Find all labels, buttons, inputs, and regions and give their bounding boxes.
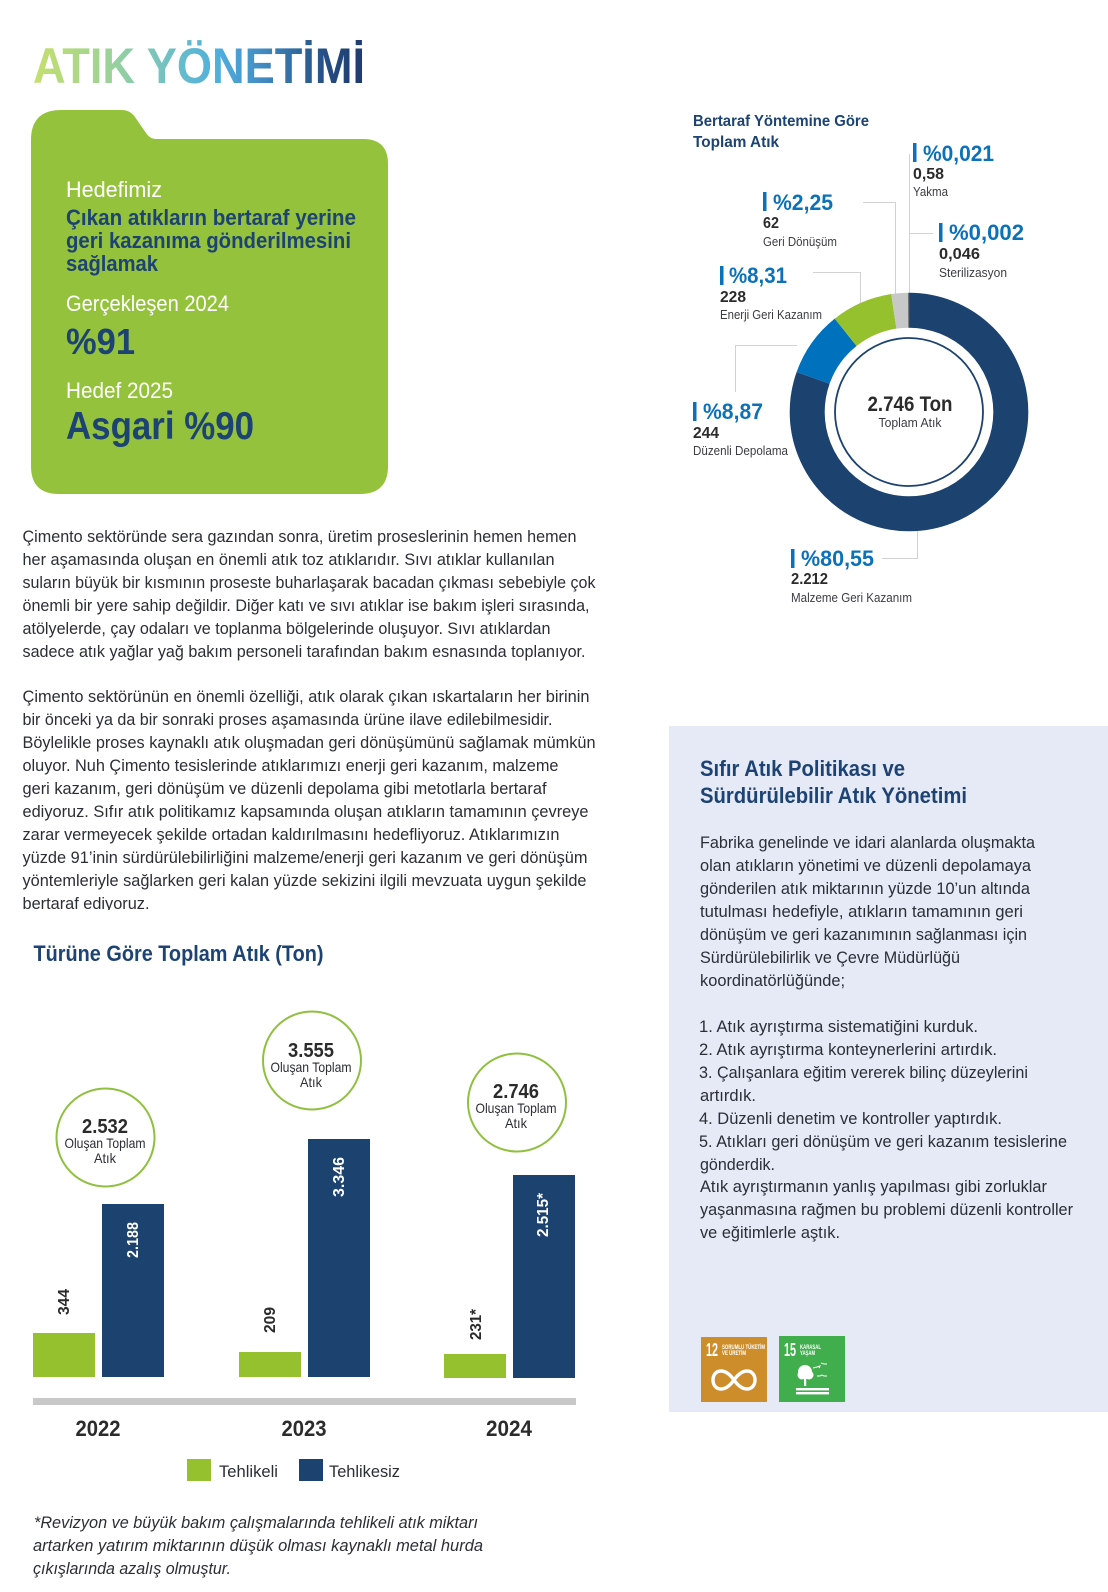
panel action list: yaşanmasına rağmen bu problemi düzenli kontroller [700, 1200, 1073, 1219]
bars 2022 [33, 1204, 164, 1377]
axis [33, 1398, 576, 1405]
icon: SDG 12: SORUMLU TÜKETİM [722, 1344, 765, 1351]
realised label: Gerçekleşen 2024 [66, 291, 229, 316]
total bubble 2024: 2.746 [493, 1081, 539, 1103]
label: Geri Dönüşüm: Geri Dönüşüm [763, 234, 837, 249]
bar chart: waste by type [33, 1012, 576, 1441]
donut centre total: 2.746 Ton [868, 393, 952, 416]
total bubble 2022 [56, 1088, 154, 1186]
year labels: 2023 [282, 1416, 326, 1441]
label: Düzenli Depolama: 244 [693, 425, 719, 442]
year labels [76, 1416, 533, 1441]
panel heading [700, 756, 967, 808]
label: Geri Dönüşüm: 62 [763, 215, 779, 232]
panel intro text: Fabrika genelinde ve idari alanlarda oluşmakta [700, 833, 1036, 852]
panel intro text [700, 833, 1036, 990]
panel action list: 1. Atık ayrıştırma sistematiğini kurduk. [699, 1017, 978, 1036]
label: Düzenli Depolama: %8,87 [703, 399, 763, 424]
text block: intro paragraph 1: atölyelerde, çay odaları ve toplanma bölgelerinde oluşuyor. Sıvı atıklardan [22, 619, 550, 638]
icon: SDG 12: 12 [706, 1340, 718, 1360]
year labels: 2024 [486, 1416, 533, 1441]
label: Sterilizasyon: %0,002 [949, 220, 1024, 245]
label: Sterilizasyon: 0,046 [939, 246, 980, 263]
target statement: Çıkan atıkların bertaraf yerine [66, 205, 356, 230]
icon: SDG 15: YAŞAM [800, 1351, 815, 1357]
legend [187, 1459, 400, 1481]
icon: SDG 12 [701, 1337, 767, 1402]
text block: intro paragraph 2: yöntemleriyle sağlarken geri kalan yüzde sekizini ilgili mevzuata uygun şekilde [22, 871, 586, 890]
panel action list: 4. Düzenli denetim ve kontroller yaptırdık. [699, 1109, 1002, 1128]
donut ring [807, 310, 1011, 514]
text block: intro paragraph 1 [22, 527, 596, 661]
label: Enerji Geri Kazanım [720, 263, 822, 322]
2025 target label: Hedef 2025 [66, 378, 173, 403]
panel intro text: olan atıkların yönetimi ve düzenli depolamaya [700, 856, 1032, 875]
target statement: sağlamak [66, 251, 159, 276]
total bubble 2023 [263, 1012, 361, 1110]
panel action list: gönderdik. [700, 1155, 775, 1174]
donut chart: disposal method [736, 154, 1011, 558]
label: Sterilizasyon [939, 220, 1024, 280]
panel action list: 5. Atıkları geri dönüşüm ve geri kazanım tesislerine [699, 1132, 1067, 1151]
panel intro text: koordinatörlüğünde; [700, 971, 845, 990]
text block: intro paragraph 1: önemli bir yere sahip değildir. Diğer katı ve sıvı atıklar ise bakım işleri sırasında, [22, 596, 590, 615]
panel intro text: tutulması hedefiyle, atıkların tamamının geri [700, 902, 1023, 921]
panel intro text: dönüşüm ve geri kazanımının sağlanması için [700, 925, 1027, 944]
text block: intro paragraph 2: bir önceki ya da bir sonraki proses aşamasında ürüne ilave edilebilmesidir. [22, 710, 552, 729]
donut centre total [868, 393, 952, 430]
total bubble 2024: Oluşan Toplam [476, 1100, 556, 1116]
text block: intro paragraph 2 [20, 687, 596, 916]
bars 2024: 2.515* [535, 1192, 552, 1237]
label: Malzeme Geri Kazanım [791, 546, 912, 605]
text block: intro paragraph 2: yüzde 91’inin sürdürülebilirliğini malzeme/enerji geri kazanım ve geri dönüşüm [22, 848, 588, 867]
text block: intro paragraph 2: ediyoruz. Sıfır atık politikamız kapsamında oluşan atıkların tamamının çevreye [22, 802, 588, 821]
inner ring [835, 338, 983, 486]
text block: intro paragraph 1: suların büyük bir kısmının proseste buharlaşarak bacadan çıkması sebebiyle çok [22, 573, 596, 592]
label: Enerji Geri Kazanım: 228 [720, 289, 746, 306]
label: Yakma: %0,021 [923, 141, 994, 166]
folder shape [31, 110, 388, 494]
bars 2024 [444, 1175, 575, 1378]
label: Geri Dönüşüm: %2,25 [773, 190, 833, 215]
icon: SDG 15 [779, 1336, 845, 1402]
heading: disposal method: Bertaraf Yöntemine Göre [693, 113, 869, 130]
label: Malzeme Geri Kazanım: %80,55 [801, 546, 874, 571]
heading: disposal method: Toplam Atık [693, 134, 779, 151]
2025 target value: Asgari %90 [66, 405, 254, 448]
heading: waste by type: Türüne Göre Toplam Atık (Ton) [34, 941, 324, 966]
bars 2023: 3.346 [331, 1157, 348, 1197]
bars 2022: 2.188 [125, 1222, 142, 1258]
bars 2024: 231* [468, 1308, 485, 1340]
target label: Hedefimiz [66, 177, 162, 202]
footnote [33, 1513, 483, 1578]
target statement: geri kazanıma gönderilmesini [66, 228, 351, 253]
target statement [66, 205, 356, 276]
footnote: artarken yatırım miktarının düşük olması kaynaklı metal hurda [33, 1536, 483, 1555]
text block: intro paragraph 2: zarar vermeyecek şekilde ortadan kaldırılmasını hedefliyoruz. Atıklarımızın [22, 825, 560, 844]
text block: intro paragraph 1: her aşamasında oluşan en önemli atık toz atıklarıdır. Sıvı atıklar kullanılan [22, 550, 554, 569]
label: Sterilizasyon: Sterilizasyon [939, 265, 1007, 280]
label: Düzenli Depolama [693, 399, 789, 458]
total bubble 2024: Atık [505, 1115, 528, 1131]
label: Enerji Geri Kazanım: Enerji Geri Kazanım [720, 307, 822, 322]
bars 2023 [239, 1139, 370, 1377]
panel background [669, 726, 1108, 1412]
panel: zero waste policy [669, 726, 1108, 1412]
panel action list: 2. Atık ayrıştırma konteynerlerini artırdık. [699, 1040, 997, 1059]
label: Malzeme Geri Kazanım: Malzeme Geri Kazanım [791, 590, 912, 605]
realised value: %91 [66, 321, 135, 362]
label: Enerji Geri Kazanım: %8,31 [729, 263, 787, 288]
label: Yakma: 0,58 [913, 166, 944, 183]
footnote: çıkışlarında azalış olmuştur. [33, 1559, 231, 1578]
label: Yakma [913, 141, 994, 199]
label: Yakma: Yakma [913, 184, 949, 199]
text block: intro paragraph 2: bertaraf ediyoruz. [22, 894, 150, 913]
text block: intro paragraph 2: Böylelikle proses kaynaklı atık oluşmadan geri dönüşümünü sağlamak mümkün [22, 733, 596, 752]
total bubble 2022: Oluşan Toplam [64, 1135, 146, 1151]
panel: target folder [31, 110, 388, 494]
text block: intro paragraph 2: oluyor. Nuh Çimento tesislerinde atıklarımızı enerji geri kazanım, malzeme [22, 756, 558, 775]
text block: intro paragraph 1: sadece atık yağlar yağ bakım personeli tarafından bakım esnasında toplanıyor. [22, 642, 586, 661]
icon: SDG 12: VE ÜRETİM [722, 1350, 746, 1357]
icon: SDG 15: KARASAL [800, 1345, 821, 1351]
total bubble 2024 [468, 1054, 566, 1152]
text block: intro paragraph 2: Çimento sektörünün en önemli özelliği, atık olarak çıkan ıskartaların her birinin [22, 687, 590, 706]
total bubble 2022: Atık [94, 1150, 117, 1166]
panel intro text: gönderilen atık miktarının yüzde 10’un altında [700, 879, 1031, 898]
year labels: 2022 [76, 1416, 120, 1441]
text block: intro paragraph 1: Çimento sektöründe sera gazından sonra, üretim proseslerinin hemen hemen [22, 527, 576, 546]
legend: Tehlikesiz [329, 1462, 400, 1481]
panel intro text: Sürdürülebilirlik ve Çevre Müdürlüğü [700, 948, 960, 967]
legend: Tehlikeli [219, 1462, 278, 1481]
panel action list: ve eğitimlerle aştık. [700, 1223, 840, 1242]
total bubble 2023: Oluşan Toplam [270, 1059, 352, 1075]
heading: disposal method [693, 113, 869, 151]
panel action list [699, 1017, 1073, 1242]
label: Geri Dönüşüm [763, 190, 837, 249]
total bubble 2023: Atık [300, 1074, 323, 1090]
panel action list: 3. Çalışanlara eğitim vererek bilinç düzeylerini [699, 1063, 1028, 1082]
total bubble 2023: 3.555 [288, 1040, 334, 1062]
panel action list: artırdık. [700, 1086, 756, 1105]
bars 2023: 209 [262, 1307, 279, 1333]
total bubble 2022: 2.532 [82, 1116, 128, 1138]
panel heading: Sürdürülebilir Atık Yönetimi [700, 783, 967, 808]
footnote: *Revizyon ve büyük bakım çalışmalarında tehlikeli atık miktarı [34, 1513, 478, 1532]
icon: SDG 15: 15 [784, 1340, 796, 1360]
label: Düzenli Depolama: Düzenli Depolama [693, 443, 789, 458]
bars 2022: 344 [56, 1289, 73, 1315]
panel action list: Atık ayrıştırmanın yanlış yapılması gibi zorluklar [700, 1177, 1047, 1196]
label: Malzeme Geri Kazanım: 2.212 [791, 571, 828, 588]
text block: intro paragraph 2: geri kazanım, geri dönüşüm ve düzenli depolama gibi metotlarla bertaraf [22, 779, 547, 798]
title: ATIK YÖNETİMİ [33, 38, 365, 94]
panel heading: Sıfır Atık Politikası ve [700, 756, 905, 781]
donut centre total: Toplam Atık [878, 415, 942, 430]
